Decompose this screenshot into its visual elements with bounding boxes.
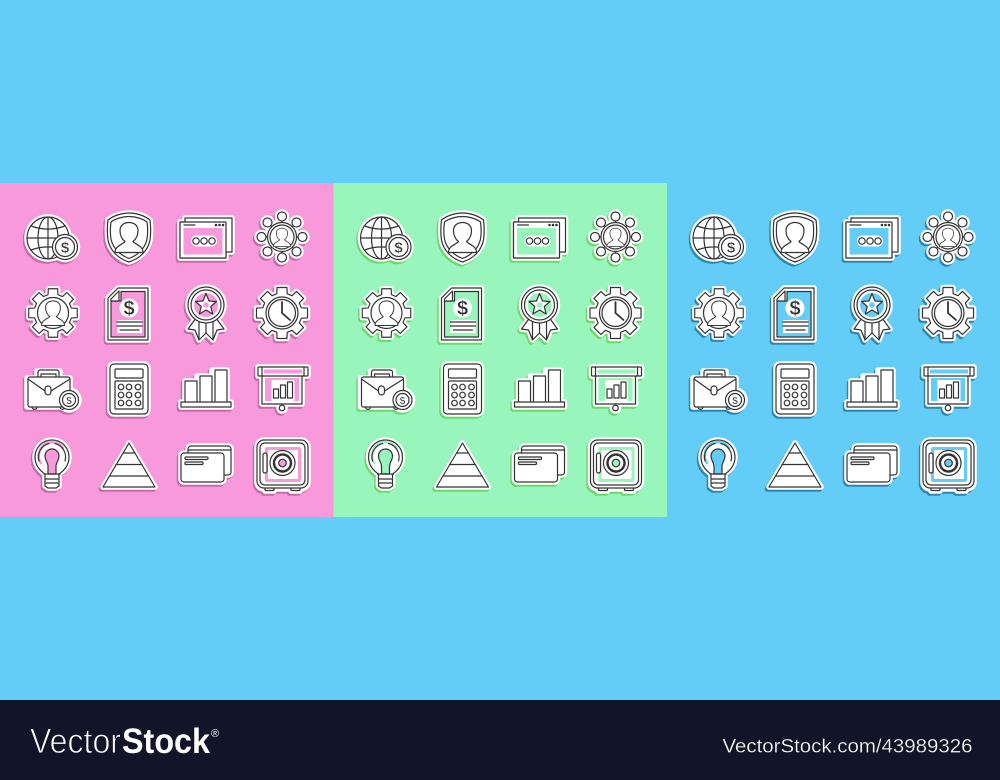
icon: globe with dollar <box>692 217 744 262</box>
image id text: VectorStock.com/43989326 <box>722 736 972 758</box>
icon: star medal <box>852 287 890 342</box>
icon: clock gear <box>921 287 974 341</box>
logo: VectorStock <box>30 722 219 761</box>
icon: user gear <box>27 289 77 339</box>
icon: star medal <box>186 287 224 342</box>
icon: browser window <box>844 218 898 260</box>
icon: globe with dollar <box>26 217 78 262</box>
icon: calculator <box>774 364 814 416</box>
icon: calculator <box>108 364 148 416</box>
icon: cards <box>180 446 231 484</box>
icon: light bulb <box>34 440 69 490</box>
panel: green icon set <box>334 183 667 517</box>
icon: safe <box>589 440 642 493</box>
icon: cards <box>846 446 897 484</box>
icon: safe <box>256 440 308 493</box>
icon: briefcase with coin <box>359 370 412 412</box>
icon: browser window <box>512 218 566 260</box>
logo: VectorStock: ® <box>211 728 219 740</box>
icon: pyramid <box>768 443 821 489</box>
icon: user gear <box>361 289 411 339</box>
icon: pyramid <box>102 443 155 489</box>
panel: pink icon set <box>0 183 334 517</box>
icon: presentation board <box>922 367 974 413</box>
icon: bar chart <box>846 370 897 409</box>
icon: light bulb <box>700 440 735 490</box>
icon: user network <box>922 212 973 264</box>
footer bar <box>0 700 1000 780</box>
icon: light bulb <box>367 440 402 490</box>
icon: user network <box>256 212 307 264</box>
icon: user shield <box>772 213 817 264</box>
icon: presentation board <box>256 367 308 413</box>
icon: user network <box>589 212 640 264</box>
logo: VectorStock: Vector <box>30 722 121 761</box>
icon: safe <box>922 440 974 493</box>
icon: clock gear <box>588 287 641 341</box>
icon: presentation board <box>590 367 642 413</box>
icon: clock gear <box>255 287 308 341</box>
panel: blue icon set <box>692 212 974 493</box>
icon: user shield <box>439 213 484 264</box>
icon: dollar document <box>440 288 482 342</box>
icon: star medal <box>520 287 558 342</box>
icon: briefcase with coin <box>26 370 79 412</box>
icon: bar chart <box>513 370 564 409</box>
icon: user gear <box>693 289 743 339</box>
icon: dollar document <box>772 288 814 342</box>
icon: bar chart <box>180 370 231 409</box>
icon: calculator <box>442 364 482 416</box>
icon: dollar document <box>106 288 148 342</box>
icon: globe with dollar <box>359 217 411 262</box>
logo: VectorStock: Stock <box>122 722 210 761</box>
icon: user shield <box>106 213 151 264</box>
icon: pyramid <box>435 443 488 489</box>
icon: browser window <box>178 218 232 260</box>
icon: cards <box>513 446 564 484</box>
icon: briefcase with coin <box>692 370 745 412</box>
